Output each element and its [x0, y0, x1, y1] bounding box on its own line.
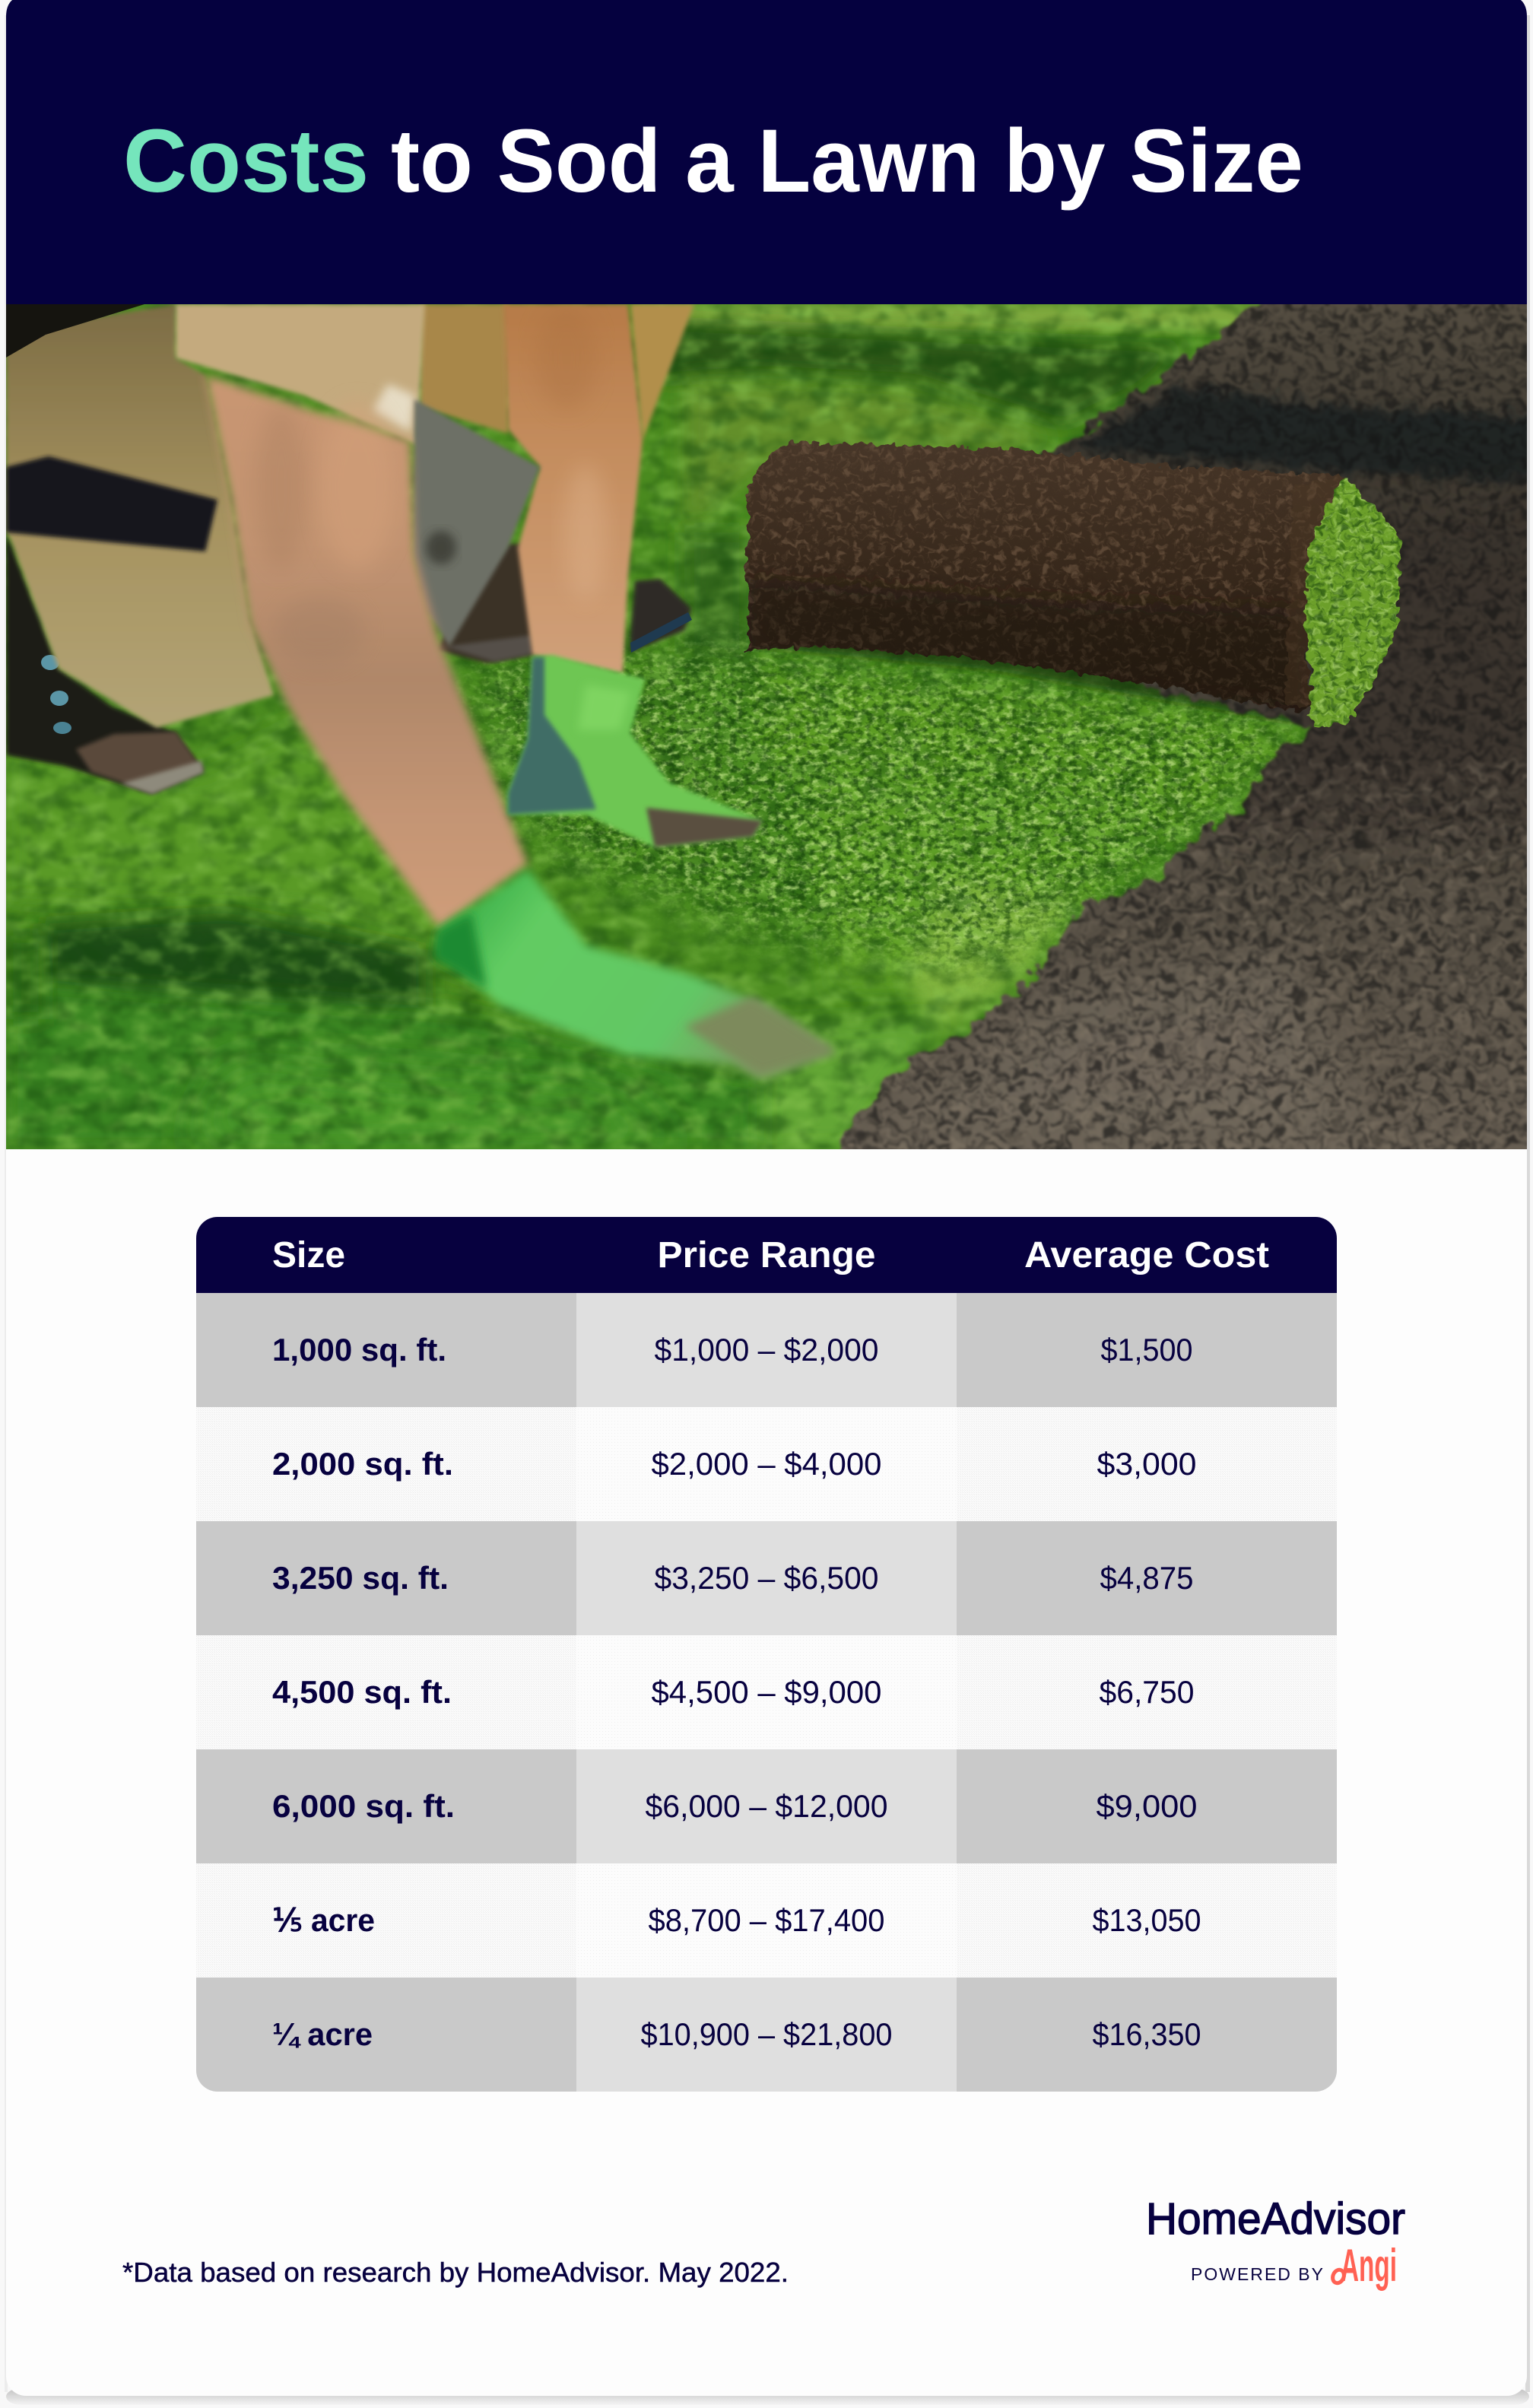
row: 1/4 acre: ¼ acre [272, 2016, 373, 2052]
row: 1,000 sq. ft.: $1,500 [1101, 1332, 1192, 1368]
back shorts [421, 304, 694, 440]
table column headings: Size [272, 1235, 345, 1275]
row: 2,000 sq. ft.: $2,000 – $4,000 [651, 1446, 882, 1482]
row: 6,000 sq. ft.: $9,000 [1097, 1788, 1197, 1824]
row 7 background [196, 1978, 1337, 2092]
grey rag tucked at waist [413, 399, 540, 646]
table header row [196, 1217, 1337, 1293]
worker shorts [6, 304, 274, 728]
grass tuft at roll end [1303, 478, 1402, 727]
table column headings: Average Cost [1024, 1235, 1269, 1275]
row: 4,500 sq. ft.: $6,750 [1100, 1674, 1194, 1710]
row: 2,000 sq. ft.: $3,000 [1097, 1446, 1197, 1482]
logo: HomeAdvisor powered by Angi: Angi [1341, 2240, 1397, 2291]
row: 1/4 acre: $16,350 [1092, 2016, 1201, 2052]
row: 4,500 sq. ft.: 4,500 sq. ft. [272, 1674, 452, 1710]
row: 2,000 sq. ft. [272, 1446, 1197, 1482]
row 5 background [196, 1749, 1337, 1863]
row: 6,000 sq. ft. [272, 1788, 1197, 1824]
soil [838, 304, 1527, 1149]
row: 3,250 sq. ft. [272, 1560, 1194, 1596]
grass base [6, 304, 1312, 1149]
row: 6,000 sq. ft.: $6,000 – $12,000 [645, 1788, 888, 1824]
row: 4,500 sq. ft.: $4,500 – $9,000 [651, 1674, 882, 1710]
logo: HomeAdvisor powered by Angi: POWERED BY [1191, 2264, 1323, 2284]
row 2 background [196, 1407, 1337, 1521]
logo: HomeAdvisor powered by Angi: HomeAdvisor [1146, 2194, 1405, 2244]
shirt highlight [373, 384, 415, 432]
row: 1/5 acre: $13,050 [1092, 1902, 1201, 1938]
table [196, 1217, 1337, 2092]
row: 4,500 sq. ft. [272, 1674, 1194, 1710]
row: 6,000 sq. ft.: 6,000 sq. ft. [272, 1788, 455, 1824]
row: 3,250 sq. ft.: $3,250 – $6,500 [654, 1560, 879, 1596]
row: 1,000 sq. ft.: 1,000 sq. ft. [272, 1332, 446, 1368]
row: 1/4 acre [272, 2016, 1201, 2052]
table column headings: Price Range [657, 1235, 876, 1275]
near arm [205, 375, 528, 929]
worker boot [6, 532, 204, 794]
back shoe [437, 544, 692, 663]
logo: HomeAdvisor powered by Angi [1146, 2194, 1405, 2291]
row: 3,250 sq. ft.: $4,875 [1100, 1560, 1194, 1596]
photo: worker laying a sod roll on soil [6, 304, 1527, 1149]
row: 2,000 sq. ft.: 2,000 sq. ft. [272, 1446, 453, 1482]
sod roll [741, 437, 1350, 715]
row 1 background [196, 1293, 1337, 1407]
row 3 background [196, 1521, 1337, 1635]
worker waist strap [6, 304, 144, 357]
row 6 background [196, 1863, 1337, 1978]
row: 1/4 acre: $10,900 – $21,800 [640, 2016, 893, 2052]
table column headings [272, 1235, 1269, 1275]
footnote: *Data based on research by HomeAdvisor. May 2022. [122, 2257, 789, 2288]
near glove [433, 869, 836, 1080]
row: 3,250 sq. ft.: 3,250 sq. ft. [272, 1560, 449, 1596]
header band [6, 0, 1527, 304]
shorts pocket band [6, 456, 217, 551]
far glove [508, 655, 763, 847]
row: 1/5 acre: $8,700 – $17,400 [648, 1902, 885, 1938]
title: Costs [123, 111, 369, 211]
row: 1,000 sq. ft.: $1,000 – $2,000 [654, 1332, 879, 1368]
row: 1/5 acre: ⅕ acre [272, 1902, 375, 1938]
row: 1,000 sq. ft. [272, 1332, 1192, 1368]
row 4 background [196, 1635, 1337, 1749]
title: to Sod a Lawn by Size [391, 111, 1303, 211]
worker shirt [176, 304, 425, 445]
back leg [503, 304, 643, 674]
row: 1/5 acre [272, 1902, 1201, 1938]
